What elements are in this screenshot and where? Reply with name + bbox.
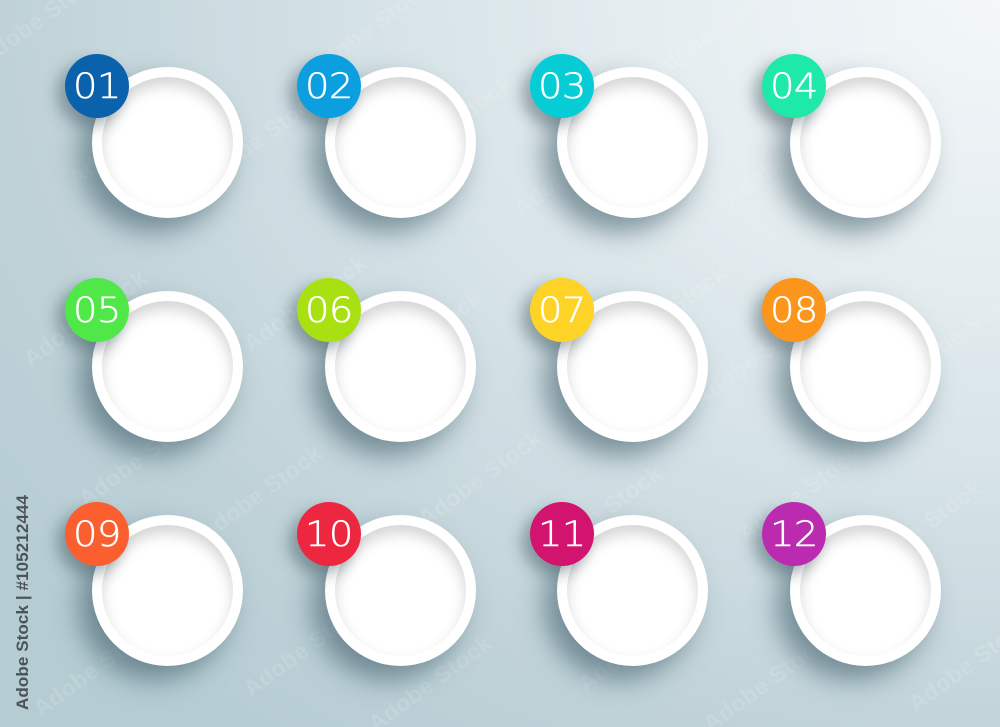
infographic canvas: Adobe Stock [353,285,487,391]
circle item 02 [281,54,480,248]
infographic canvas: Adobe Stock [843,120,977,226]
number badge 08 [762,278,826,342]
number badge 01 [64,54,128,118]
infographic canvas: Adobe Stock [193,440,327,546]
number badge 03 [530,54,594,118]
circle item 07 [514,278,712,472]
number badge 02: 02 [305,65,353,106]
number badge 08: 08 [770,289,818,330]
number badge 10 [297,502,361,566]
infographic canvas: Adobe Stock [73,405,207,511]
circle item 01 [49,54,246,248]
number badge 03: 03 [538,65,585,106]
number badge 07 [530,278,594,342]
number badge 02 [297,54,361,118]
number badge 05: 05 [73,289,120,330]
number badge 09: 09 [73,513,120,554]
infographic canvas: Adobe Stock [18,265,152,371]
infographic canvas: Adobe Stock [383,70,517,176]
number badge 11 [530,502,594,566]
infographic canvas: Adobe Stock [193,85,327,191]
number badge 06 [297,278,361,342]
infographic canvas: Adobe Stock [28,615,162,721]
number badge 06: 06 [305,289,353,330]
number badge 09 [64,502,128,566]
number badge 01: 01 [73,65,120,106]
infographic canvas: Adobe Stock [63,85,197,191]
stock id text: Adobe Stock | #105212444 [13,495,32,710]
infographic canvas: Adobe Stock [573,590,707,696]
infographic canvas: Adobe Stock [238,595,372,701]
infographic canvas: Adobe Stock [718,105,852,211]
infographic canvas: Adobe Stock [688,305,822,411]
circle item 04 [746,53,945,248]
infographic canvas: Adobe Stock [598,260,732,366]
infographic canvas: Adobe Stock [238,250,372,356]
number badge 04: 04 [770,65,818,106]
infographic canvas: Adobe Stock [533,460,667,566]
circle item 12 [746,502,944,696]
circle item 09 [49,502,246,695]
circle item 11 [514,502,711,696]
number badge 04 [762,54,826,118]
number badge 12 [762,502,826,566]
circle item 03 [514,54,712,248]
circle item 08 [746,278,944,472]
number badge 12: 12 [770,513,818,554]
number badge 11: 11 [538,513,585,554]
number badge 05 [64,278,128,342]
number badge 10: 10 [305,513,353,554]
circle item 05 [49,278,246,472]
infographic canvas: Adobe Stock [508,115,642,221]
circle item 06 [281,278,479,472]
number badge 07: 07 [538,289,585,330]
infographic canvas: Adobe Stock [733,440,867,546]
circle item 10 [281,502,478,696]
infographic canvas: Adobe Stock [853,475,987,581]
infographic canvas: Adobe Stock [413,425,547,531]
